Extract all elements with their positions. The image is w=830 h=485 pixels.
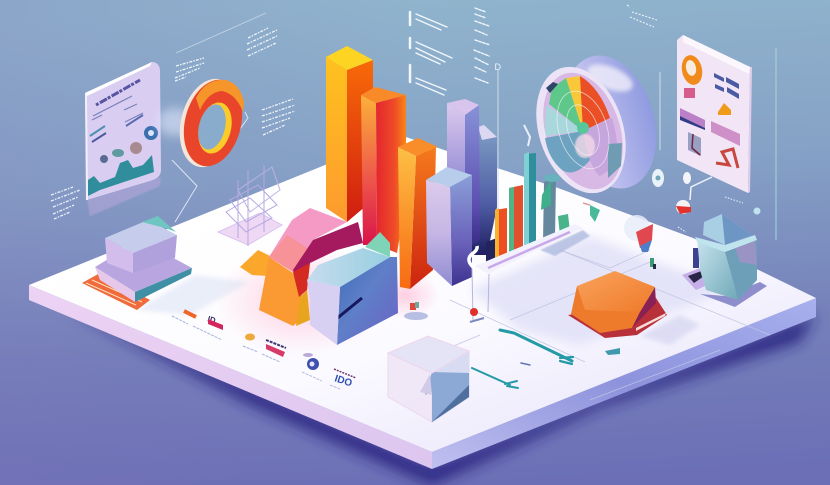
blue tags bbox=[714, 73, 739, 99]
gem right face bbox=[337, 257, 398, 345]
donut rim bbox=[171, 73, 247, 173]
floor legend marks bbox=[172, 311, 356, 389]
cube top bbox=[388, 336, 469, 373]
legend item 1 bbox=[172, 311, 223, 340]
orange badge bbox=[718, 103, 731, 115]
bar chart: lavender columns bbox=[426, 99, 497, 286]
document reflection bbox=[87, 177, 161, 216]
document top edge bbox=[85, 62, 152, 96]
document page bbox=[85, 62, 161, 200]
bar: orange bbox=[495, 208, 507, 264]
red floating tag bbox=[676, 200, 691, 214]
tower right body bbox=[725, 240, 757, 300]
small floor marker bbox=[404, 302, 428, 320]
right floating document panel bbox=[677, 35, 752, 193]
magenta and orange shape bbox=[240, 208, 363, 326]
page side edge bbox=[748, 67, 752, 193]
tower left body bbox=[697, 238, 738, 300]
small right caption bbox=[678, 197, 743, 232]
stack orange base bbox=[82, 273, 150, 310]
gem body bbox=[571, 286, 640, 333]
small bar chart on shelf bbox=[475, 152, 590, 274]
orange flank bbox=[240, 250, 270, 276]
tower band bbox=[695, 235, 757, 252]
legend item 1: ID bbox=[206, 314, 217, 325]
platform left side bbox=[29, 285, 432, 469]
document mini chart lines bbox=[90, 115, 143, 142]
orange body bbox=[259, 257, 308, 326]
small green cube bbox=[558, 214, 570, 236]
bar: green red bbox=[509, 185, 523, 256]
purple tray bbox=[682, 268, 712, 290]
stack orange stripes bbox=[86, 280, 142, 305]
box top bbox=[105, 220, 177, 253]
disc dark tip bbox=[546, 82, 558, 93]
donut chart bbox=[157, 73, 251, 173]
stack tier left bbox=[95, 267, 135, 302]
platform shadow bbox=[60, 305, 816, 485]
teal bracket lines bbox=[472, 330, 573, 388]
bar chart: large orange bars bbox=[326, 46, 438, 289]
wireframe chart on floor bbox=[218, 165, 282, 246]
legend item 2 bbox=[243, 334, 286, 362]
disc centre bbox=[577, 122, 589, 134]
blue faceted gem bbox=[307, 232, 398, 345]
column front bbox=[426, 167, 472, 286]
hook stand and red marker bbox=[469, 246, 489, 322]
vertical guide lines bbox=[660, 48, 776, 240]
radial disc chart bbox=[521, 45, 671, 205]
white drop bubble bbox=[683, 172, 691, 184]
donut hole bbox=[194, 102, 230, 152]
disc blue sector bbox=[545, 131, 590, 172]
floating small mint icon bbox=[754, 208, 760, 214]
orange faceted gem bbox=[568, 271, 700, 345]
gem left face bbox=[307, 280, 340, 345]
gem base bbox=[568, 298, 667, 338]
disc red sector bbox=[580, 76, 610, 131]
small green figure bbox=[650, 258, 656, 269]
legend item 3: IDO bbox=[333, 373, 354, 389]
bar: teal bbox=[524, 153, 536, 250]
disc purple sector bbox=[583, 118, 617, 176]
small blue chip bbox=[605, 348, 620, 355]
tall pin guide: D bbox=[494, 62, 502, 72]
orange donut icon bbox=[679, 53, 705, 87]
box right bbox=[133, 235, 177, 273]
disc face bbox=[529, 63, 637, 199]
donut glow bbox=[157, 108, 193, 136]
gem right bbox=[632, 287, 656, 328]
connector line to panel bbox=[172, 112, 248, 222]
annotation text mid bbox=[262, 99, 295, 135]
annotation line above donut bbox=[176, 13, 266, 53]
small image icon bbox=[684, 88, 695, 98]
shelf trim bbox=[488, 232, 570, 268]
gem shadow bbox=[640, 315, 700, 345]
bar 1 bbox=[326, 46, 373, 222]
floor tint right bbox=[470, 236, 730, 345]
shelf top bbox=[475, 224, 583, 274]
disc green sector bbox=[549, 78, 583, 131]
cube inner gem bbox=[425, 372, 469, 422]
column back bbox=[470, 125, 497, 255]
platform bbox=[29, 135, 816, 469]
shelf shadow bbox=[540, 230, 590, 256]
glass cube bbox=[388, 336, 469, 422]
floor grid lines bbox=[420, 250, 770, 400]
disc yellow sector bbox=[566, 76, 590, 131]
bar: dark back bbox=[486, 238, 497, 268]
box teal accent bbox=[142, 216, 176, 232]
tower shadow bbox=[700, 282, 767, 307]
stack tier top bbox=[95, 240, 192, 292]
annotation text top bbox=[175, 28, 277, 81]
small icon near pin bbox=[524, 125, 530, 146]
disc rings bbox=[548, 85, 618, 175]
gem dark groove bbox=[335, 298, 362, 320]
top right caption bbox=[627, 5, 657, 27]
picture left bbox=[688, 132, 701, 156]
donut ring bbox=[175, 74, 251, 172]
cube left face bbox=[388, 353, 432, 422]
document icons bbox=[144, 126, 158, 140]
bar: grey-green bbox=[543, 178, 556, 242]
donut orange sector bbox=[196, 80, 244, 112]
gem top bbox=[577, 271, 655, 312]
left panel caption bbox=[51, 187, 80, 219]
top centre annotations bbox=[410, 8, 490, 95]
mint cap bbox=[365, 232, 390, 257]
document teal skyline bbox=[88, 155, 154, 196]
stack tier right bbox=[135, 268, 192, 302]
document heading bbox=[96, 80, 140, 105]
legend item 3 bbox=[302, 353, 356, 389]
floating white connector bbox=[690, 177, 712, 200]
disc steel sector bbox=[608, 143, 622, 178]
bar 2 bbox=[361, 87, 406, 253]
floating white shield icon bbox=[652, 169, 664, 187]
cube right face bbox=[432, 351, 469, 422]
purple stripes bbox=[680, 108, 705, 128]
pink glow around shapes bbox=[215, 245, 439, 355]
stack shadow bbox=[137, 275, 250, 315]
small bulb on floor bbox=[624, 215, 653, 252]
tower roof bbox=[703, 214, 752, 245]
wireframe base bbox=[218, 213, 282, 245]
page top edge bbox=[683, 35, 750, 74]
pink top bbox=[269, 208, 347, 272]
page bbox=[677, 35, 750, 193]
disc teal sector bbox=[545, 105, 583, 136]
disc rim bbox=[521, 55, 641, 205]
document left edge bbox=[85, 93, 88, 200]
red inner bbox=[293, 263, 310, 297]
dark magenta hollow bbox=[293, 222, 363, 295]
platform top surface bbox=[29, 135, 816, 452]
donut inner yellow bbox=[193, 99, 237, 157]
disc highlight bbox=[584, 59, 636, 97]
column middle bbox=[447, 99, 480, 250]
picture right arrow bbox=[716, 149, 738, 168]
gem top bbox=[307, 248, 390, 287]
disc body bbox=[549, 45, 671, 199]
platform right side bbox=[432, 298, 816, 469]
box left bbox=[105, 238, 133, 273]
left stacked block bbox=[82, 216, 250, 315]
bar 3 bbox=[398, 138, 438, 289]
left floating document panel bbox=[85, 62, 161, 216]
small green sprout bbox=[583, 203, 600, 222]
document text lines bbox=[92, 96, 143, 122]
right glass tower bbox=[682, 214, 767, 307]
